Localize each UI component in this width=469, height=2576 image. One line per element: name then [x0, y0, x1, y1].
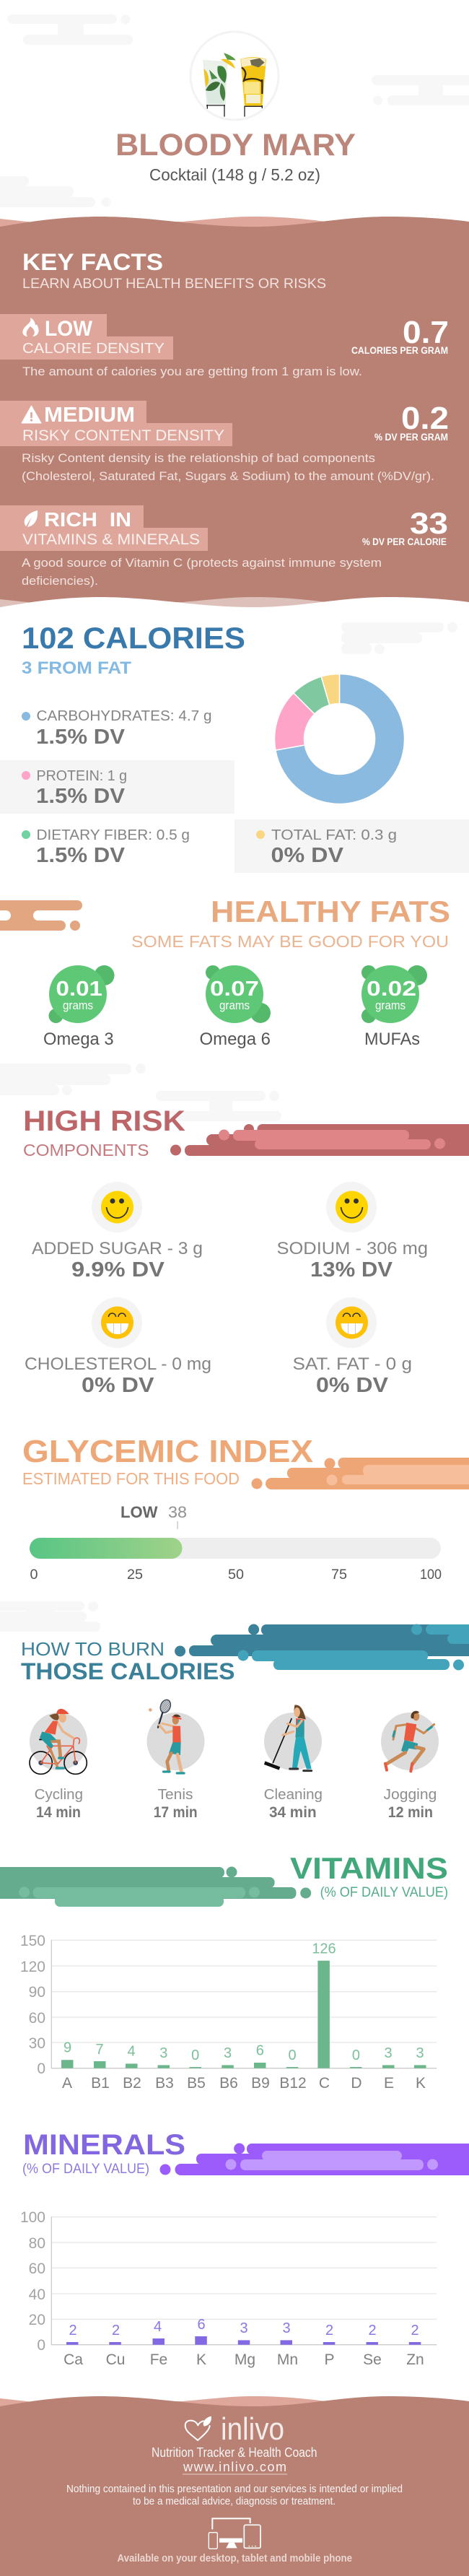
panel: high risk components: [0, 1063, 469, 1397]
activity: cycling: 14 min: [36, 1804, 81, 1821]
chart: minerals bar chart: 4: [154, 2319, 162, 2335]
component: added sugar: 9.9% DV: [71, 1258, 165, 1282]
panel: vitamins: [0, 1851, 448, 2092]
activity: jogging: Jogging: [384, 1787, 437, 1803]
website link: www.inlivo.com: [183, 2460, 286, 2474]
fact: vitamins and minerals: % DV PER CALORIE: [362, 536, 447, 547]
legend: protein: PROTEIN: 1 g: [36, 768, 127, 784]
chart: minerals bar chart: Zn: [406, 2351, 424, 2368]
fact: vitamins and minerals: 33: [410, 506, 448, 540]
chart: minerals bar chart: 2: [411, 2323, 419, 2338]
availability note: Available on your desktop, tablet and mobile phone: [117, 2552, 352, 2564]
chart: vitamins bar chart: 0: [37, 2061, 45, 2077]
chart: vitamins bar chart: 3: [224, 2045, 232, 2061]
fact: calorie density: LOW: [45, 317, 93, 341]
fat: omega 6: 0.07: [210, 978, 259, 1001]
fact: calorie density: CALORIE DENSITY: [22, 341, 165, 357]
fact: risky content density: Risky Content density is the relationship of bad components: [22, 451, 375, 465]
activity: cleaning: [264, 1705, 323, 1821]
heading: 102 calories: 102 CALORIES: [22, 621, 245, 655]
chart: vitamins bar chart: B1: [91, 2075, 110, 2092]
heading: minerals: MINERALS: [23, 2129, 185, 2161]
legend: carbohydrates: 1.5% DV: [36, 726, 126, 749]
gauge label: 38: [168, 1503, 187, 1521]
activity: jogging: [381, 1711, 439, 1821]
subheading: components: COMPONENTS: [23, 1141, 149, 1159]
icon: leaf: [25, 510, 38, 527]
chart: minerals bar chart: Mn: [277, 2351, 298, 2368]
panel: healthy fats: [0, 895, 450, 1049]
fact: vitamins and minerals: VITAMINS & MINERALS: [22, 531, 200, 548]
chart: vitamins bar chart: B5: [187, 2075, 206, 2092]
chart: minerals bar chart: 0: [37, 2337, 45, 2354]
activity: cycling: Cycling: [35, 1787, 83, 1803]
activity: jogging: 12 min: [388, 1804, 433, 1821]
fact: calorie density: 0.7: [403, 315, 449, 350]
fat: mufas: grams: [375, 998, 406, 1012]
legend: protein: 1.5% DV: [36, 785, 126, 808]
heading: glycemic index: GLYCEMIC INDEX: [22, 1434, 313, 1469]
chart: minerals bar chart: 100: [20, 2209, 45, 2226]
component: added sugar: ADDED SUGAR - 3 g: [32, 1239, 203, 1258]
legend: carbohydrates: CARBOHYDRATES: 4.7 g: [36, 708, 212, 724]
chart: minerals bar chart: P: [324, 2351, 335, 2368]
fat: mufas: [361, 965, 427, 1049]
component: added sugar: [32, 1182, 203, 1282]
decorative stripe: burn: [175, 1624, 469, 1671]
fact: risky content density: % DV PER GRAM: [374, 432, 448, 443]
fat: omega 3: [43, 965, 114, 1049]
chart: vitamins bar chart: 7: [95, 2042, 104, 2058]
fact: calorie density: CALORIES PER GRAM: [351, 345, 448, 356]
legend: carbohydrates: [22, 708, 212, 749]
fat: omega 6: grams: [219, 998, 250, 1012]
chart: minerals bar chart: 20: [29, 2312, 45, 2328]
fact: calorie density: [0, 314, 449, 378]
subheading: SOME FATS MAY BE GOOD FOR YOU: [131, 932, 449, 951]
logo: inlivo wordmark: inlivo: [221, 2411, 284, 2447]
chart: vitamins bar chart: 120: [20, 1959, 45, 1975]
chart: vitamins bar chart: D: [351, 2075, 362, 2092]
chart: minerals bar chart: K: [196, 2351, 206, 2368]
chart: vitamins bar chart: 4: [127, 2044, 136, 2060]
legend: dietary fiber: [22, 827, 190, 867]
fact: risky content density: RISKY CONTENT DENSITY: [22, 427, 224, 444]
chart: minerals bar chart: 40: [29, 2286, 45, 2303]
panel: minerals: [20, 2129, 469, 2368]
disclaimer: [66, 2483, 403, 2507]
chart: vitamins bar chart: C: [319, 2075, 330, 2092]
panel: header: [0, 14, 469, 207]
subheading: (% OF DAILY VALUE): [320, 1885, 448, 1900]
chart: minerals bar chart: Ca: [63, 2351, 83, 2368]
chart: minerals bar chart: Fe: [150, 2351, 167, 2368]
chart: minerals bar chart: 60: [29, 2260, 45, 2277]
decorative stripe: high risk: [170, 1124, 469, 1156]
heading: high risk: HIGH RISK: [23, 1105, 185, 1137]
chart: glycemic gauge: 75: [331, 1567, 347, 1583]
activity: cleaning: Cleaning: [264, 1787, 323, 1803]
legend: total fat: 0% DV: [271, 844, 344, 867]
fat: mufas: 0.02: [367, 978, 416, 1001]
chart: vitamins bar chart: 0: [288, 2048, 297, 2063]
chart: vitamins bar chart: B3: [155, 2075, 174, 2092]
activity: tennis: Tenis: [157, 1787, 193, 1803]
legend: protein: [0, 760, 234, 814]
chart: vitamins bar chart: K: [416, 2075, 426, 2092]
activity: tennis: [147, 1698, 205, 1821]
disclaimer: Nothing contained in this presentation and our services is intended or implied: [66, 2483, 403, 2495]
component: cholesterol: [25, 1297, 211, 1397]
fact: vitamins and minerals: deficiencies).: [22, 574, 98, 588]
chart: vitamins bar chart: E: [384, 2075, 394, 2092]
chart: minerals bar chart: 80: [29, 2235, 45, 2252]
chart: glycemic gauge: 50: [228, 1567, 244, 1583]
activity: cycling: [30, 1709, 87, 1821]
heading: vitamins: VITAMINS: [290, 1851, 448, 1885]
chart: vitamins bar chart: 3: [384, 2045, 393, 2061]
fat: omega 6: [199, 965, 271, 1049]
panel: how to burn those calories: [0, 1601, 469, 1821]
chart: minerals bar chart: 3: [240, 2320, 248, 2336]
icon: devices: [209, 2518, 260, 2549]
heading: healthy fats: HEALTHY FATS: [211, 895, 450, 928]
chart: vitamins bar chart: 3: [416, 2045, 424, 2061]
decorative stripe: minerals: [160, 2143, 469, 2175]
chart: vitamins bar chart: 3: [159, 2045, 167, 2061]
component: sodium: 13% DV: [310, 1258, 393, 1282]
decorative stripe: vitamins: [0, 1867, 311, 1907]
component: saturated fat: 0% DV: [316, 1374, 389, 1397]
subheading: LEARN ABOUT HEALTH BENEFITS OR RISKS: [22, 277, 326, 292]
chart: vitamins bar chart: [20, 1933, 437, 2092]
chart: vitamins bar chart: 150: [20, 1933, 45, 1949]
fat: omega 3: grams: [63, 998, 93, 1012]
chart: vitamins bar chart: A: [62, 2075, 72, 2092]
decorative stripe: glycemic: [251, 1458, 469, 1489]
chart: minerals bar chart: Mg: [234, 2351, 255, 2368]
chart: vitamins bar chart: 9: [63, 2040, 71, 2056]
chart: vitamins bar chart: 126: [312, 1941, 336, 1957]
chart: glycemic gauge: [30, 1538, 442, 1583]
activity: cleaning: 34 min: [269, 1804, 317, 1821]
chart: minerals bar chart: Se: [363, 2351, 382, 2368]
chart: minerals bar chart: 6: [197, 2317, 206, 2333]
icon: warning triangle: [22, 406, 41, 423]
component: cholesterol: CHOLESTEROL - 0 mg: [25, 1354, 211, 1374]
chart: vitamins bar chart: 6: [256, 2043, 264, 2059]
fat: omega 6: Omega 6: [199, 1030, 271, 1049]
component: saturated fat: [293, 1297, 412, 1397]
chart: glycemic gauge: 25: [127, 1567, 143, 1583]
chart: minerals bar chart: 2: [325, 2323, 333, 2338]
disclaimer: to be a medical advice, diagnosis or treatment.: [133, 2495, 336, 2507]
subheading: (% OF DAILY VALUE): [22, 2162, 149, 2177]
chart: vitamins bar chart: 30: [29, 2035, 45, 2052]
chart: vitamins bar chart: B2: [123, 2075, 141, 2092]
chart: vitamins bar chart: 90: [29, 1984, 45, 2001]
fact: calorie density: The amount of calories you are getting from 1 gram is low.: [22, 365, 362, 378]
title: BLOODY MARY: [115, 128, 356, 162]
component: cholesterol: 0% DV: [82, 1374, 154, 1397]
panel: key facts: [0, 217, 469, 619]
component: sodium: [277, 1182, 428, 1282]
chart: minerals bar chart: 2: [112, 2323, 120, 2338]
component: sodium: SODIUM - 306 mg: [277, 1239, 428, 1258]
fact: risky content density: [0, 401, 449, 483]
activity: tennis: 17 min: [154, 1804, 198, 1821]
subheading: ESTIMATED FOR THIS FOOD: [22, 1469, 240, 1488]
panel: footer: [0, 2396, 469, 2576]
chart: minerals bar chart: 2: [368, 2323, 377, 2338]
icon: drink photo in circle: [190, 32, 279, 120]
legend: total fat: TOTAL FAT: 0.3 g: [271, 827, 397, 843]
fat: omega 3: Omega 3: [43, 1030, 114, 1049]
chart: minerals bar chart: 3: [282, 2320, 291, 2336]
fact: risky content density: 0.2: [401, 401, 449, 436]
chart: macronutrient donut: [275, 674, 405, 804]
fact: risky content density: MEDIUM: [44, 404, 135, 427]
chart: minerals bar chart: Cu: [106, 2351, 125, 2368]
fact: vitamins and minerals: RICH IN: [44, 508, 131, 531]
chart: vitamins bar chart: B6: [219, 2075, 238, 2092]
heading: how to burn: HOW TO BURN: [21, 1638, 165, 1660]
chart: vitamins bar chart: B9: [251, 2075, 270, 2092]
subtitle: Cocktail (148 g / 5.2 oz): [149, 165, 320, 184]
legend: dietary fiber: DIETARY FIBER: 0.5 g: [36, 827, 190, 843]
subheading: 3 from fat: 3 FROM FAT: [22, 658, 131, 678]
panel: calories: [0, 621, 469, 873]
chart: glycemic gauge: 100: [420, 1567, 442, 1583]
chart: vitamins bar chart: B12: [279, 2075, 307, 2092]
icon: flame: [22, 318, 39, 336]
chart: minerals bar chart: [20, 2209, 437, 2368]
logo: inlivo heart: [185, 2416, 211, 2440]
panel: glycemic index: [22, 1434, 469, 1583]
gauge label: LOW: [120, 1503, 158, 1521]
heading: key facts: KEY FACTS: [22, 249, 163, 275]
chart: vitamins bar chart: 60: [29, 2010, 45, 2027]
chart: minerals bar chart: 2: [69, 2323, 77, 2338]
chart: vitamins bar chart: 0: [191, 2048, 199, 2063]
fact: vitamins and minerals: A good source of Vitamin C (protects against immune system: [22, 556, 382, 570]
legend: dietary fiber: 1.5% DV: [36, 844, 126, 867]
chart: vitamins bar chart: 0: [352, 2048, 360, 2063]
heading: those calories: THOSE CALORIES: [21, 1658, 235, 1684]
fact: vitamins and minerals: [0, 505, 448, 588]
fat: mufas: MUFAs: [364, 1030, 420, 1049]
fat: omega 3: 0.01: [56, 978, 102, 1001]
chart: glycemic gauge: 0: [30, 1567, 38, 1583]
tagline: Nutrition Tracker & Health Coach: [152, 2445, 317, 2460]
fact: risky content density: (Cholesterol, Saturated Fat, Sugars & Sodium) to the amount (%DV/gr).: [22, 469, 434, 483]
gauge label: [120, 1503, 187, 1529]
legend: total fat: [234, 819, 469, 873]
component: saturated fat: SAT. FAT - 0 g: [293, 1354, 412, 1374]
